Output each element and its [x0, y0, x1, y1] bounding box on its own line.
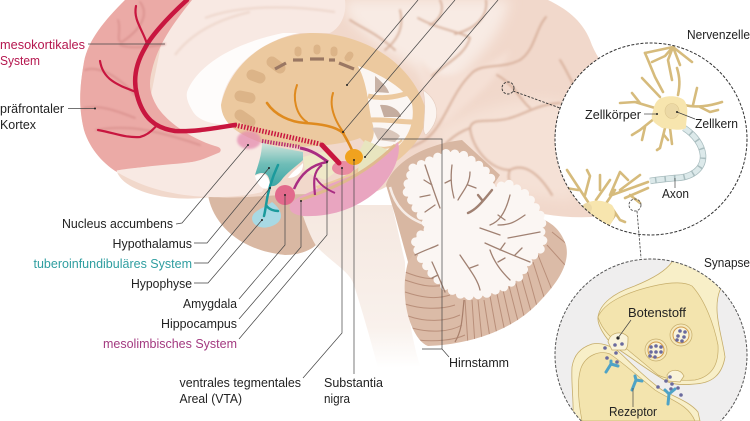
ventricle [187, 33, 300, 125]
lower neuron dendrites [566, 170, 648, 230]
hypophysis [252, 202, 281, 228]
upper terminal [598, 258, 730, 385]
white crescent [423, 90, 437, 135]
axon myelin [650, 128, 703, 181]
tuberoinfundibular pathway [264, 165, 278, 216]
cerebellar tentorium strip [386, 140, 500, 262]
mesostriatal pathway orange [267, 85, 354, 156]
nucleus accumbens hatch [237, 131, 261, 149]
cerebrum silhouette [80, 0, 640, 217]
label: mesokortikales System: System [0, 53, 40, 68]
label: ventrales tegmentales Areal: ventrales tegmentales [180, 375, 301, 390]
label: präfrontaler Kortex: präfrontaler [0, 101, 65, 116]
lower terminal [572, 343, 700, 421]
label: Hypophyse: Hypophyse [131, 276, 192, 291]
cell body [652, 96, 687, 130]
brain illustration [80, 0, 598, 350]
mesolimbic pathway [262, 141, 335, 195]
receptors [606, 361, 675, 404]
connector dashes [502, 82, 641, 258]
limbic ring tan [221, 33, 426, 194]
label: mesokortikales System: mesokortikales [0, 37, 85, 52]
label: Nucleus accumbens: Nucleus accumbens [62, 216, 173, 231]
label: Substantia nigra: nigra [324, 391, 351, 406]
cerebellum [405, 200, 567, 346]
band shading [175, 7, 335, 55]
label: präfrontaler Kortex: Kortex [0, 117, 36, 132]
label: ventrales tegmentales Areal [180, 375, 301, 406]
amygdala [275, 185, 295, 205]
temporal base [208, 190, 350, 255]
label: Zellkörper: Zellkörper [585, 107, 642, 122]
lower white band edge [117, 140, 258, 172]
label: mesolimbisches System: mesolimbisches System [103, 336, 237, 351]
white patches around hypothalamus [255, 163, 303, 189]
label: Zellkern: Zellkern [695, 116, 738, 131]
prefrontal cortex pink [80, 0, 221, 172]
VTA patch [332, 161, 354, 175]
label: Botenstoff: Botenstoff [628, 305, 686, 320]
fornix window [358, 66, 415, 172]
white matter band [117, 0, 345, 197]
cerebrum sulci [350, 0, 590, 205]
hypothalamus teal [255, 142, 303, 186]
label: tuberoinfundibuläres System: tuberoinfundibuläres System [34, 256, 192, 271]
label: Hirnstamm: Hirnstamm [449, 355, 509, 370]
label: Hippocampus: Hippocampus [161, 316, 237, 331]
brainstem [303, 205, 420, 368]
lighter upper lobes [345, 0, 510, 88]
arbor vitae [406, 153, 543, 296]
hippocampus [290, 142, 399, 216]
lower cell body [584, 200, 615, 225]
caudate slots [240, 62, 280, 122]
cerebellum folds [405, 232, 568, 345]
label: Substantia nigra: Substantia [324, 375, 384, 390]
label: Hypothalamus: Hypothalamus [112, 236, 192, 251]
synapse circle [555, 258, 747, 421]
nerve cell circle [555, 43, 747, 235]
neurotransmitter dots [603, 329, 687, 397]
pale midbrain patch [303, 150, 345, 180]
substantia nigra [345, 149, 363, 165]
neuron drawing [566, 47, 722, 235]
synaptic vesicles [608, 324, 692, 382]
label: präfrontaler Kortex [0, 101, 65, 132]
label: Amygdala: Amygdala [183, 296, 238, 311]
label: Axon: Axon [662, 186, 689, 201]
arbor vitae branches [415, 165, 540, 292]
label: Rezeptor: Rezeptor [609, 404, 658, 419]
label: mesokortikales System [0, 37, 85, 68]
leader dots [94, 84, 678, 221]
mesocortical pathway [98, 0, 339, 163]
pink sulci [84, 2, 200, 145]
label: Substantia nigra [324, 375, 384, 406]
dendrites [566, 47, 722, 230]
label: ventrales tegmentales Areal: Areal (VTA) [180, 391, 242, 406]
